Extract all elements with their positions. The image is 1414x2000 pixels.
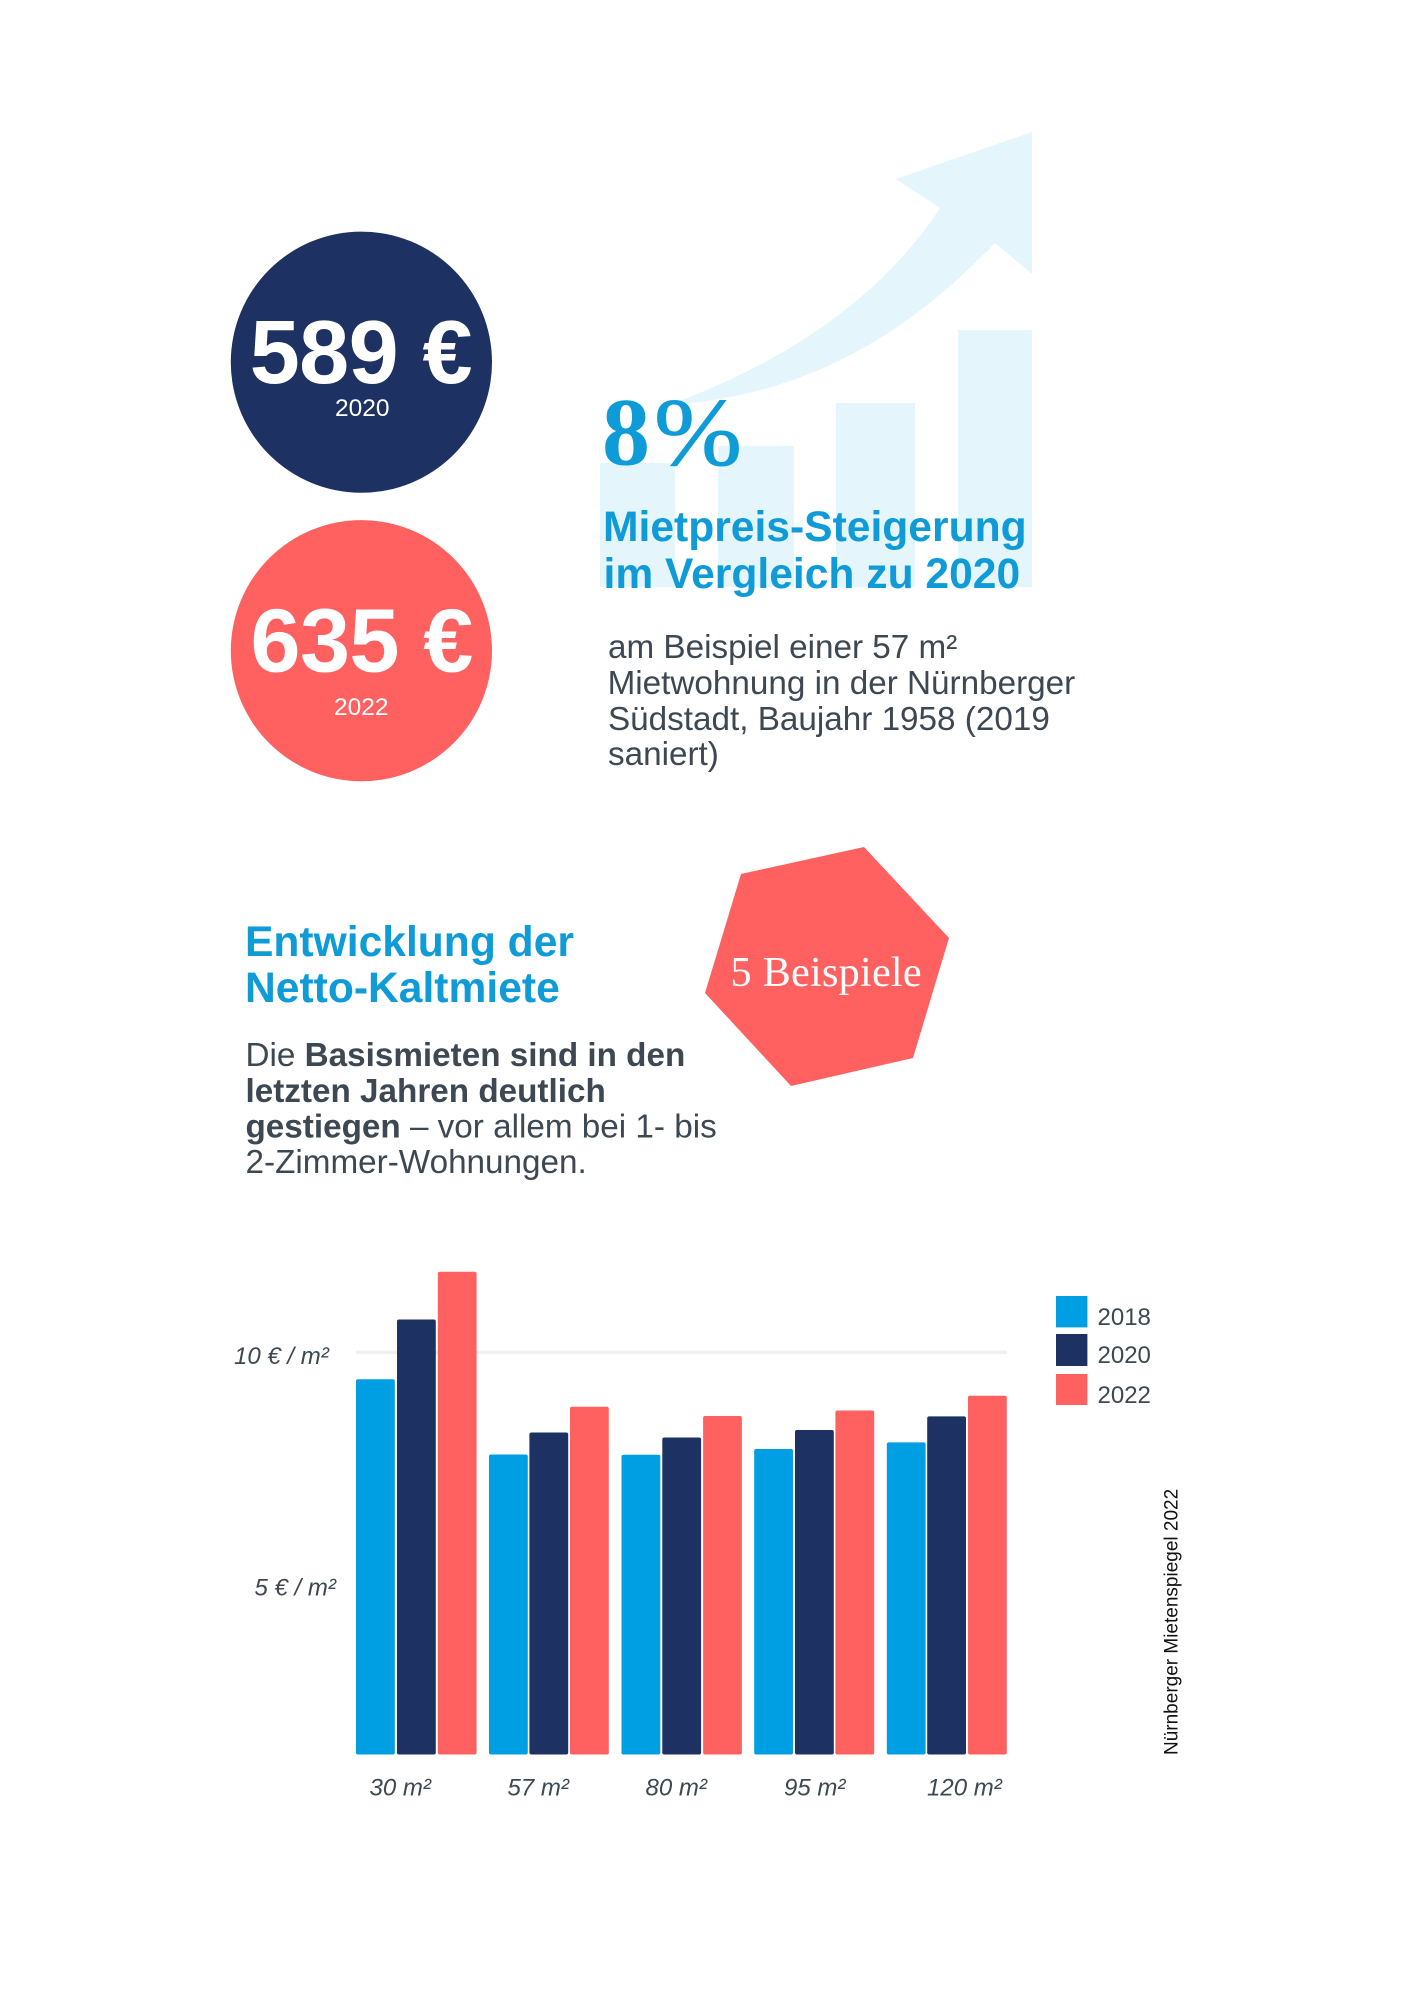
x axis labels: 80 m² — [646, 1774, 708, 1802]
heading: Entwicklung der Netto-Kaltmiete: Entwicklung der — [245, 918, 574, 966]
text block: Basismieten: Die Basismieten sind in den — [246, 1037, 685, 1074]
statistic: 8 percent: 8 — [602, 378, 650, 486]
text block: example apartment: saniert) — [608, 736, 719, 773]
x axis labels: 30 m² — [370, 1774, 432, 1802]
text block: Basismieten: letzten Jahren deutlich — [246, 1073, 606, 1110]
heading: Entwicklung der Netto-Kaltmiete — [245, 918, 574, 1012]
bars: 57 m2 — [489, 1407, 609, 1754]
x axis labels — [370, 1774, 1003, 1802]
statistic: 8 percent: % — [654, 379, 742, 485]
circle: 589 euro 2020: 589 € — [250, 303, 472, 403]
text block: example apartment: Südstadt, Baujahr 1958 (2019 — [608, 701, 1050, 738]
circle: 635 euro 2022 — [231, 520, 492, 781]
y axis labels: 10 € / m² — [234, 1343, 330, 1370]
legend: 2020 — [1098, 1342, 1151, 1369]
legend: 2018 — [1098, 1304, 1151, 1331]
text block: Basismieten — [246, 1037, 717, 1181]
bar chart: Netto-Kaltmiete — [234, 1272, 1007, 1802]
circle: 589 euro 2020: 2020 — [335, 395, 390, 422]
legend: 2022 — [1098, 1382, 1151, 1409]
text block: example apartment: Mietwohnung in der Nürnberger — [608, 665, 1075, 702]
circle: 635 euro 2022: 2022 — [334, 694, 389, 721]
y axis labels — [234, 1343, 337, 1602]
circle: 635 euro 2022: 635 € — [250, 592, 473, 692]
badge: 5 Beispiele: 5 Beispiele — [730, 949, 922, 996]
badge: 5 Beispiele — [705, 847, 949, 1086]
background icon: rising bars and arrow — [600, 132, 1032, 587]
source note: Nürnberger Mietenspiegel 2022 — [1162, 1489, 1182, 1755]
bars: 80 m2 — [622, 1416, 742, 1754]
text block: example apartment — [608, 629, 1075, 773]
legend — [1056, 1296, 1151, 1409]
heading: Mietpreis-Steigerung: im Vergleich zu 2020 — [604, 550, 1020, 598]
heading: Mietpreis-Steigerung: Mietpreis-Steigerung — [603, 503, 1027, 551]
x axis labels: 57 m² — [508, 1774, 570, 1802]
heading: Entwicklung der Netto-Kaltmiete: Netto-Kaltmiete — [245, 964, 560, 1012]
text block: example apartment: am Beispiel einer 57 m² — [608, 629, 957, 666]
x axis labels: 95 m² — [784, 1774, 846, 1802]
bars: 95 m2 — [754, 1410, 874, 1754]
text block: Basismieten: gestiegen – vor allem bei 1- bis — [246, 1109, 717, 1146]
statistic: 8 percent — [602, 378, 742, 486]
bars: 120 m2 — [887, 1396, 1007, 1754]
text block: Basismieten: 2-Zimmer-Wohnungen. — [246, 1144, 587, 1181]
heading: Mietpreis-Steigerung — [603, 503, 1027, 598]
y axis labels: 5 € / m² — [254, 1574, 337, 1602]
bars: 30 m2 — [356, 1272, 477, 1754]
x axis labels: 120 m² — [927, 1774, 1003, 1802]
circle: 589 euro 2020 — [231, 232, 492, 493]
